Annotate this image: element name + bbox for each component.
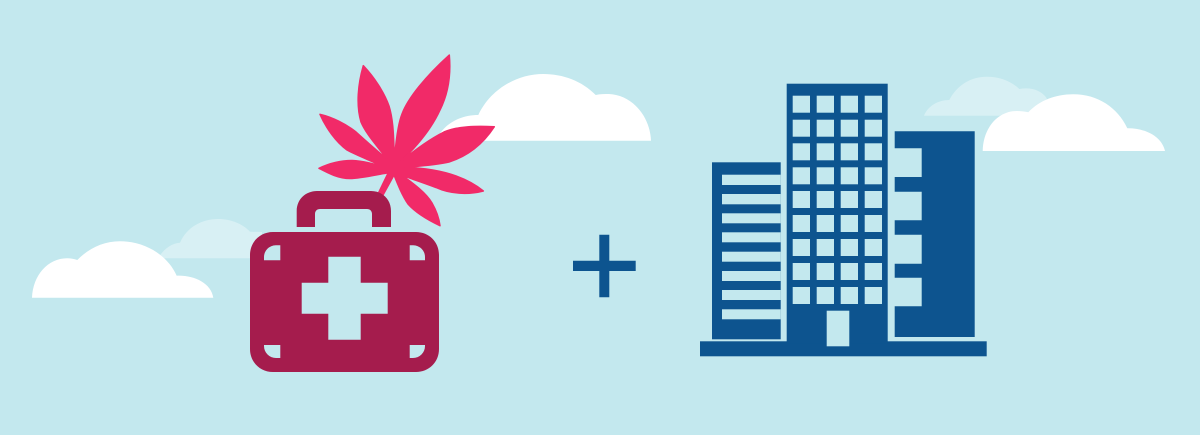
left building	[712, 162, 781, 339]
icon: medical case	[250, 191, 439, 372]
ground base	[700, 341, 987, 356]
tower windows	[793, 96, 882, 304]
case handle	[297, 191, 391, 227]
cloud: pale right	[924, 77, 1047, 116]
cloud: white centre	[436, 74, 651, 141]
cloud: pale left	[158, 219, 262, 258]
icon: plus sign	[573, 235, 636, 297]
tower door	[827, 311, 849, 346]
cloud: white right	[983, 94, 1165, 151]
right building	[895, 131, 975, 337]
icon: office buildings	[700, 84, 987, 356]
centre tower	[787, 84, 888, 344]
icon: cannabis leaf with stem	[319, 55, 494, 226]
cloud: white left	[32, 241, 213, 298]
case body with cross and corner cut-outs	[250, 232, 439, 372]
